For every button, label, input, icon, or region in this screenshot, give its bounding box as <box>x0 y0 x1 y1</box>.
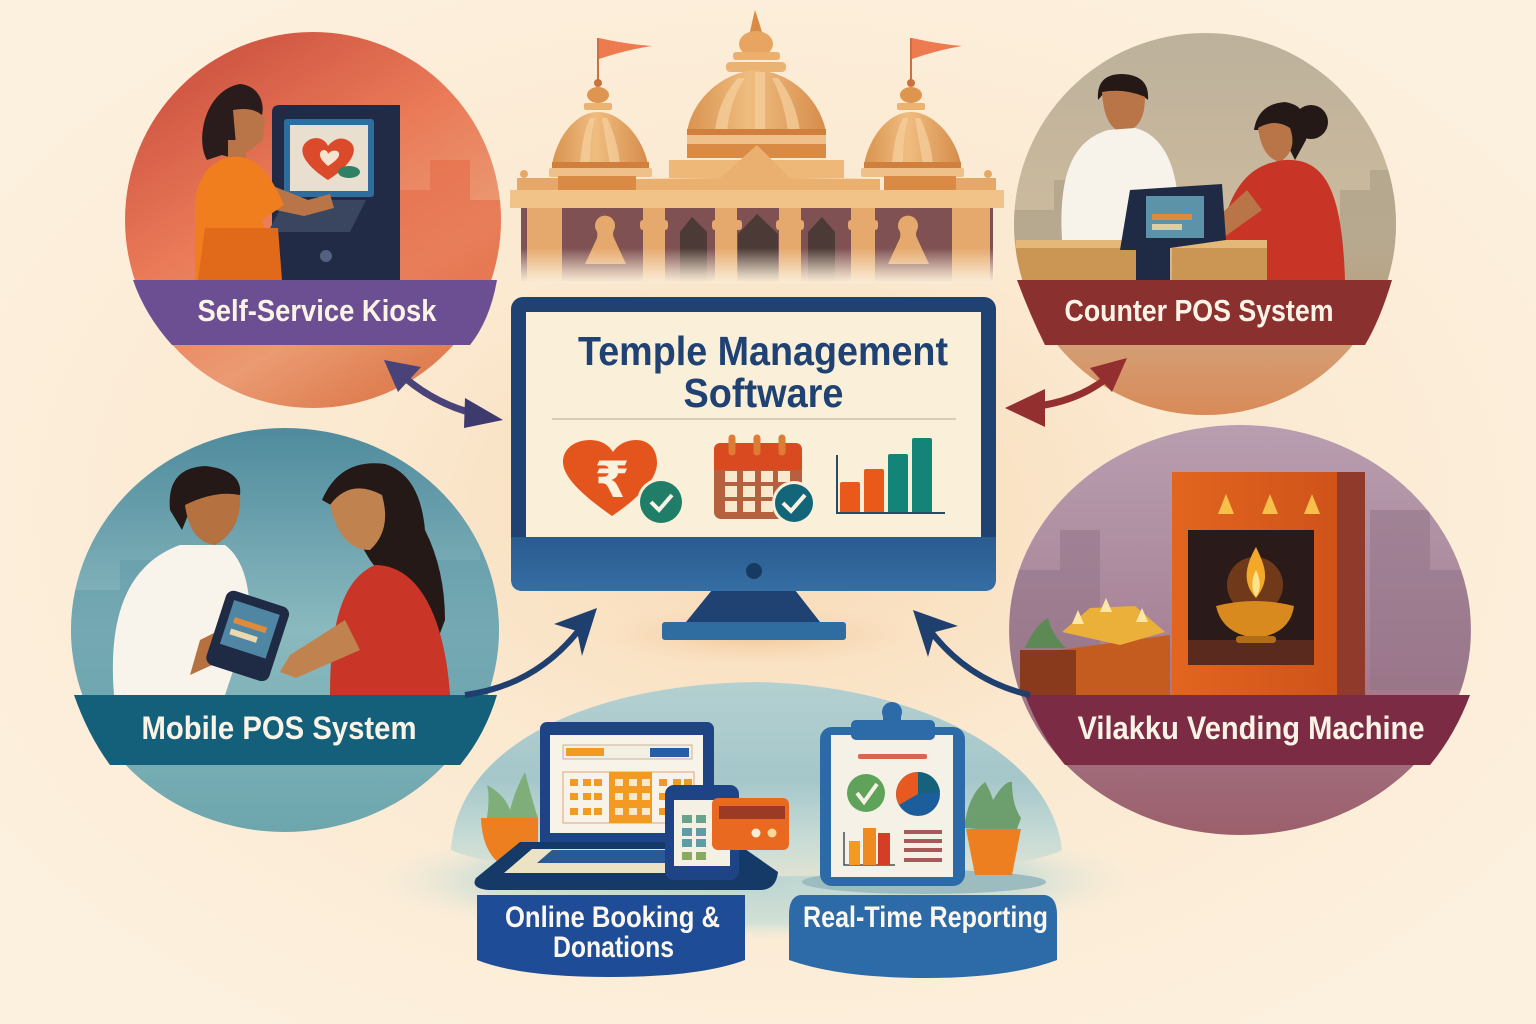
woman in orange sari <box>195 84 334 280</box>
flame and lamp <box>1216 547 1294 643</box>
circle background <box>1014 33 1396 415</box>
monitor body <box>511 297 996 591</box>
icon: rupee heart with check <box>563 440 685 526</box>
central dome <box>687 10 826 158</box>
icon: bar chart <box>837 438 945 513</box>
panel: central monitor <box>511 297 996 665</box>
circle background <box>1009 425 1471 835</box>
handheld device <box>204 589 291 683</box>
clipboard report <box>820 702 965 886</box>
label: mobile POS system <box>74 695 497 765</box>
panel: self-service kiosk <box>125 32 505 408</box>
circle background <box>71 428 499 832</box>
flag: right <box>910 38 962 82</box>
laptop <box>474 722 778 890</box>
arrow: mobile POS to monitor <box>465 608 597 695</box>
monitor stand <box>662 590 846 640</box>
monitor title <box>578 328 948 416</box>
phone <box>665 785 739 880</box>
colonnade <box>521 208 993 282</box>
parapet and pediment <box>510 145 1004 208</box>
monitor glow <box>595 605 915 665</box>
label: real-time reporting: Real-Time Reporting <box>803 901 1048 934</box>
label: self-service kiosk <box>133 280 497 345</box>
tray of lamps <box>1020 598 1170 695</box>
arrow: counter POS to monitor <box>1005 358 1127 427</box>
counter desk <box>1016 240 1267 280</box>
scene backdrop <box>365 682 1145 942</box>
temple base fade <box>520 248 994 283</box>
vending machine <box>1172 472 1365 695</box>
label: vilakku vending machine: Vilakku Vending Machine <box>1078 710 1424 746</box>
panel: counter POS system <box>1014 33 1400 415</box>
plant: left <box>481 772 538 864</box>
circle background <box>125 32 501 408</box>
panel: vilakku vending machine <box>1009 425 1471 835</box>
monitor title: Software <box>684 370 844 416</box>
icon: rupee heart with check: ₹ <box>595 451 629 509</box>
label: online booking and donations: Online Booking & <box>505 901 720 934</box>
woman customer <box>1224 102 1345 280</box>
kiosk machine <box>268 105 400 280</box>
man in white shirt <box>113 466 250 695</box>
label: self-service kiosk: Self-Service Kiosk <box>198 293 437 328</box>
label: counter POS system <box>1017 280 1392 345</box>
side dome: right <box>861 79 964 190</box>
temple illustration <box>510 10 1004 283</box>
panel: mobile POS system <box>60 428 510 832</box>
icon: calendar with check <box>714 438 816 525</box>
payment card <box>712 798 789 850</box>
arrow: vending machine to monitor <box>913 610 1030 695</box>
plant: right <box>964 782 1021 875</box>
label: counter POS system: Counter POS System <box>1064 293 1334 328</box>
side dome: left <box>549 79 652 190</box>
label: real-time reporting <box>789 895 1057 978</box>
label: vilakku vending machine <box>1025 695 1470 765</box>
POS terminal <box>1120 184 1226 280</box>
woman in red sari <box>280 463 450 695</box>
label: online booking and donations <box>477 895 745 977</box>
man at counter <box>1061 74 1178 245</box>
monitor title: Temple Management <box>578 328 948 374</box>
flag: left <box>597 38 652 82</box>
panel: bottom tools scene <box>365 682 1145 978</box>
label: mobile POS system: Mobile POS System <box>142 710 416 746</box>
arrow: kiosk to monitor <box>384 360 503 428</box>
label: online booking and donations: Donations <box>553 931 674 964</box>
